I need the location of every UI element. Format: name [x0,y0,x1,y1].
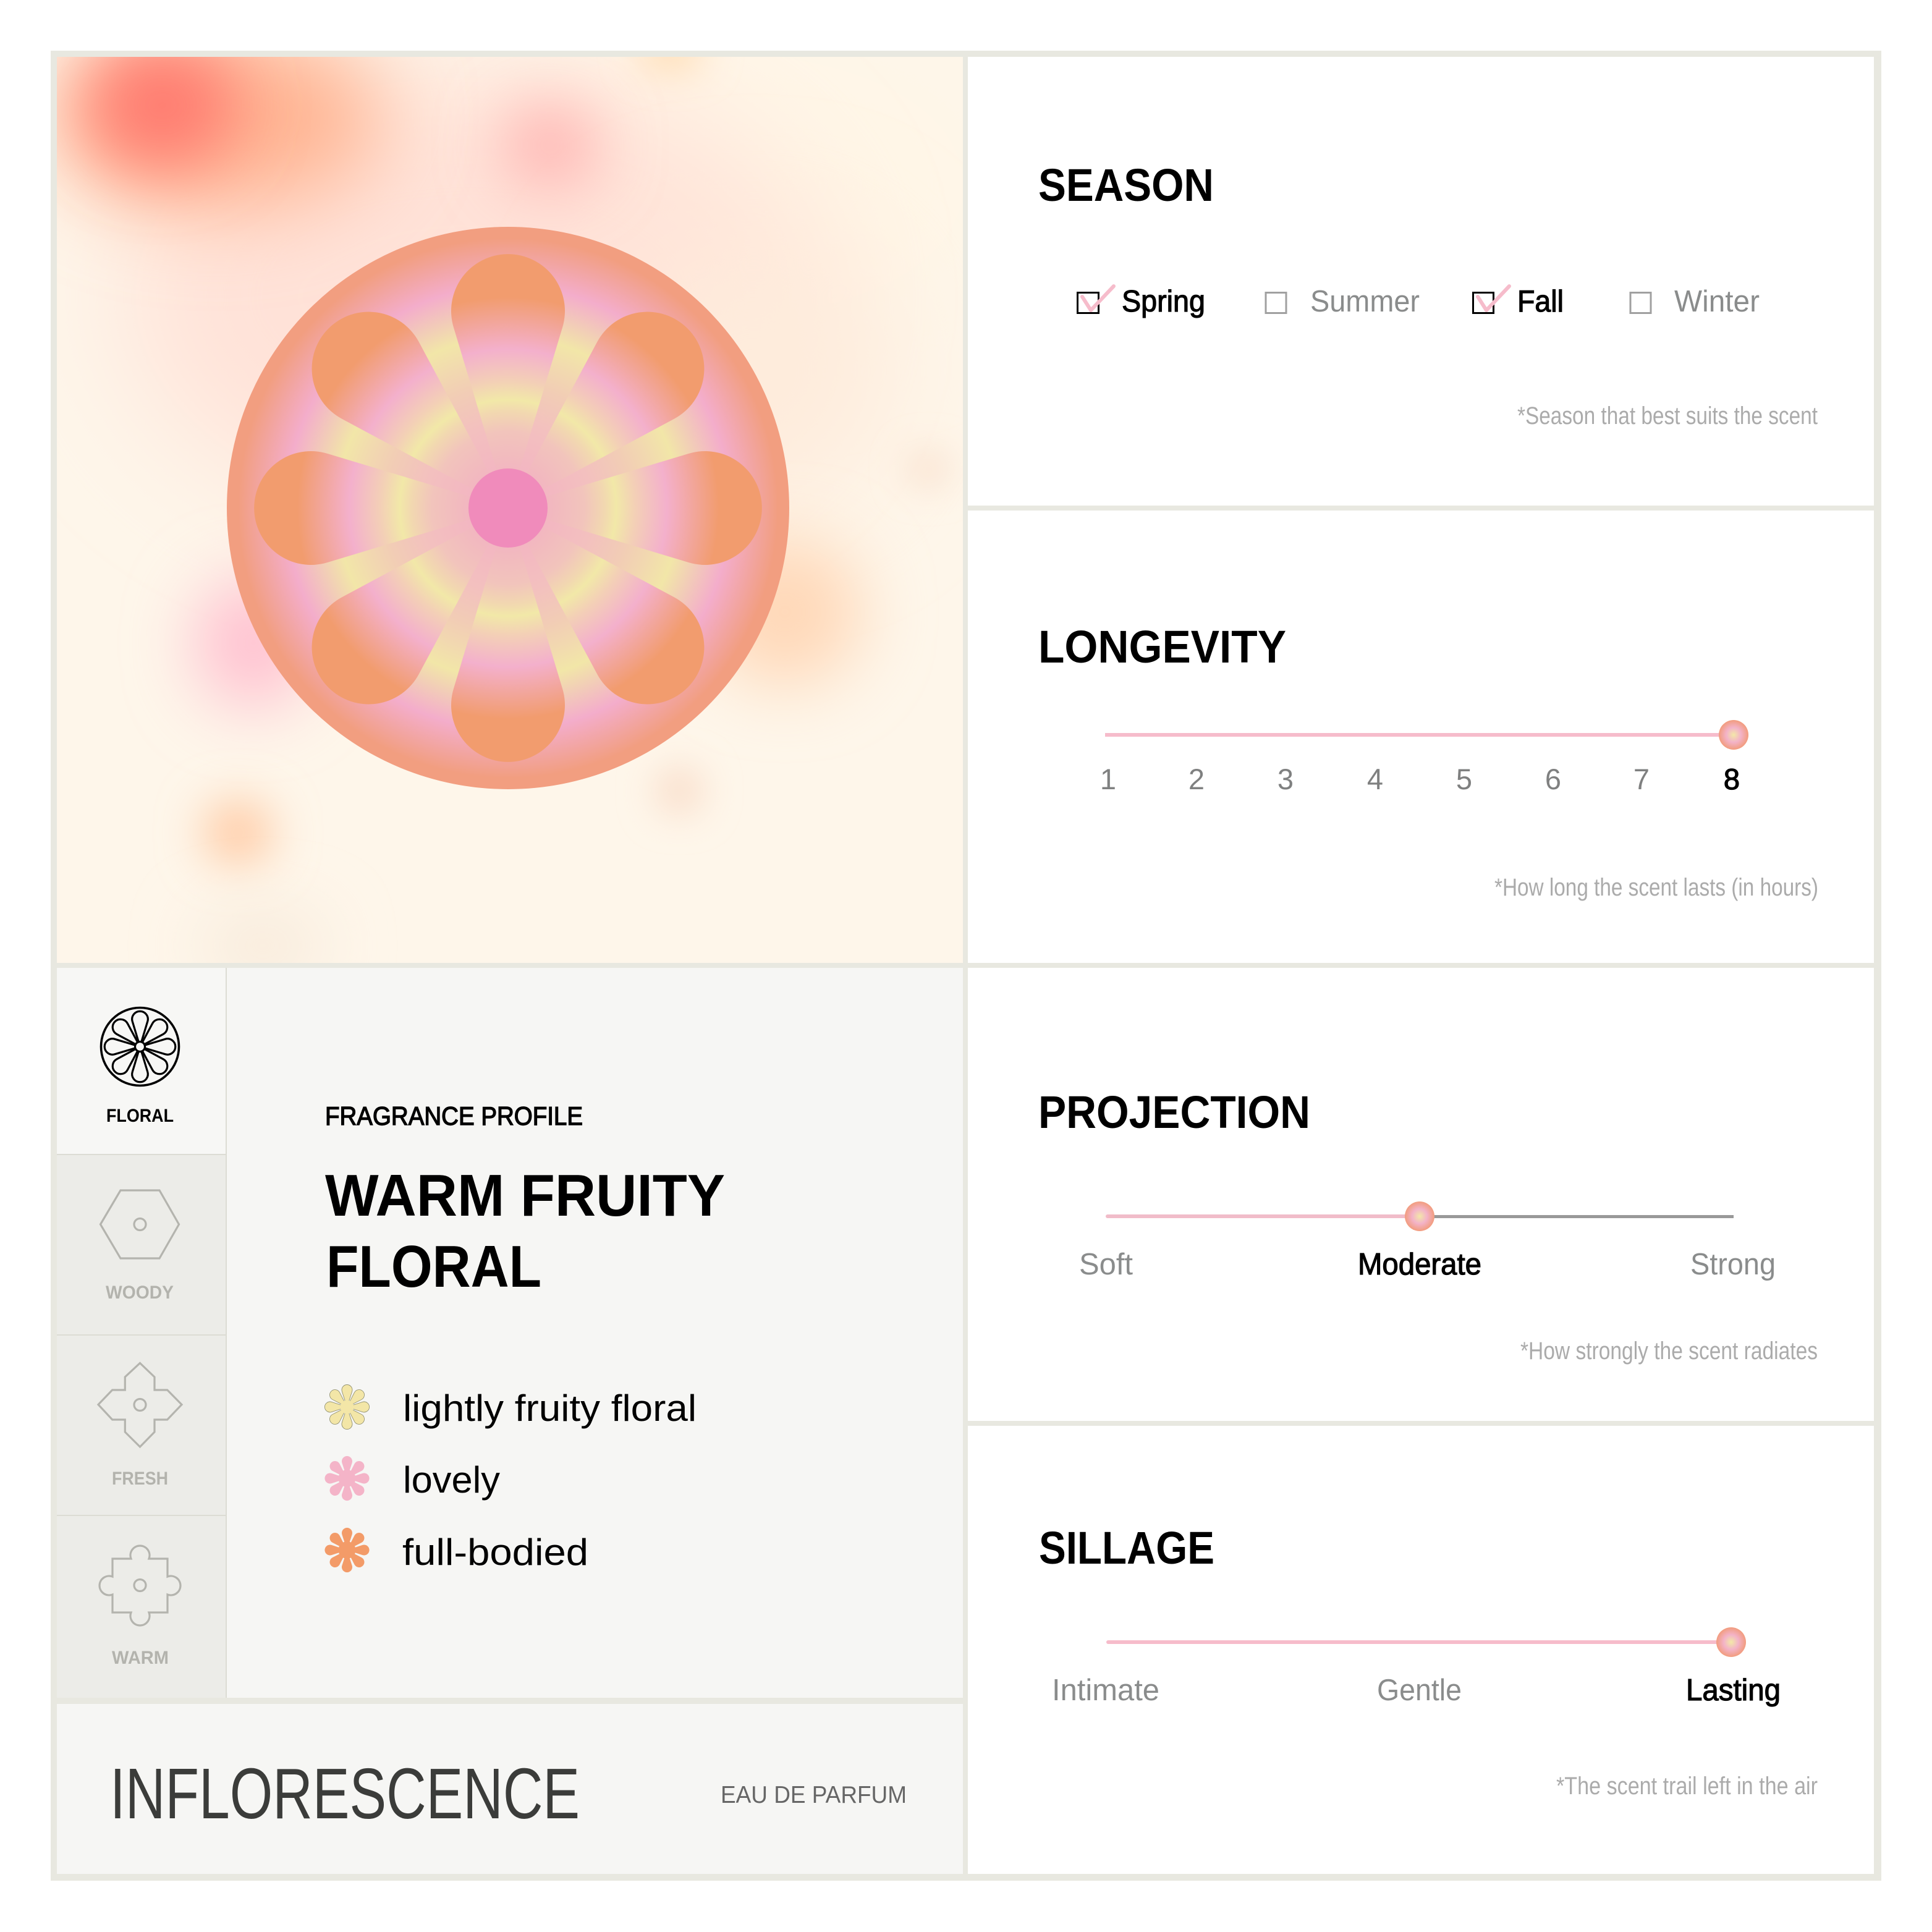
option: winter: Winter [1674,285,1760,318]
panel: longevity [968,511,1874,963]
heading: projection: PROJECTION [1038,1087,1310,1138]
note: sillage: *The scent trail left in the air [1556,1773,1818,1800]
descriptor: lovely [324,1456,500,1501]
panel: gradient artwork [49,25,989,977]
icon: floral [101,1007,179,1085]
scale: hours: 5 [1456,763,1472,795]
panel: scent family sidebar [57,968,227,1698]
label: moderate: Moderate [1358,1248,1481,1281]
heading: season: SEASON [1038,159,1214,211]
scale: hours: 2 [1188,763,1205,795]
icon: warm [100,1546,180,1625]
panel: fragrance profile [57,968,963,1698]
label: warm: WARM [112,1648,169,1668]
descriptor: lightly fruity floral: lightly fruity floral [403,1388,697,1429]
scale: hours: 1 [1100,763,1116,795]
option: summer: Summer [1310,285,1420,318]
scale: hours: 4 [1367,763,1383,795]
product type: EAU DE PARFUM [721,1782,907,1808]
note: projection: *How strongly the scent radiates [1520,1337,1818,1365]
option: fall: Fall [1517,285,1564,318]
heading: longevity: LONGEVITY [1038,621,1286,672]
option: spring: Spring [1122,285,1205,318]
label: woody: WOODY [106,1282,174,1303]
option: winter [1630,285,1760,318]
label: fresh: FRESH [112,1468,168,1489]
scale: hours: 8 [1724,763,1740,795]
descriptor: full-bodied [324,1528,588,1573]
descriptor: lightly fruity floral [324,1384,697,1430]
panel: sillage [968,1426,1874,1874]
descriptor: lovely: lovely [403,1459,500,1501]
label: gentle: Gentle [1377,1674,1462,1707]
scale: hours: 7 [1633,763,1650,795]
option: summer [1266,285,1420,318]
slider: projection [1106,1201,1734,1231]
heading: warm fruity floral [325,1163,725,1300]
brand name: INFLORESCENCE [110,1753,580,1834]
heading: warm fruity floral: WARM FRUITY [325,1163,725,1229]
flower centre [468,468,548,548]
scale: hours: 6 [1545,763,1561,795]
slider: longevity [1105,720,1748,750]
panel: projection [968,968,1874,1421]
slider: sillage [1106,1627,1746,1657]
option: spring [1078,285,1205,318]
panel: brand [57,1704,963,1874]
heading: warm fruity floral: FLORAL [326,1234,541,1300]
label: lasting: Lasting [1686,1674,1781,1707]
label: intimate: Intimate [1052,1674,1159,1707]
label: strong: Strong [1690,1248,1776,1281]
note: longevity: *How long the scent lasts (in hours) [1494,874,1818,901]
label: floral: FLORAL [106,1106,174,1126]
icon: fresh [98,1363,182,1447]
scale: hours [1100,763,1740,795]
label: soft: Soft [1079,1248,1133,1281]
heading: sillage: SILLAGE [1039,1522,1214,1574]
note: season: *Season that best suits the scent [1517,402,1818,430]
petals [254,254,762,762]
fragrance profile label: FRAGRANCE PROFILE [325,1101,583,1130]
scale: hours: 3 [1277,763,1294,795]
icon: woody [100,1190,179,1258]
panel: season [968,57,1874,506]
descriptor: full-bodied: full-bodied [402,1532,588,1573]
icon: main flower [227,227,789,789]
option: fall [1473,285,1564,318]
